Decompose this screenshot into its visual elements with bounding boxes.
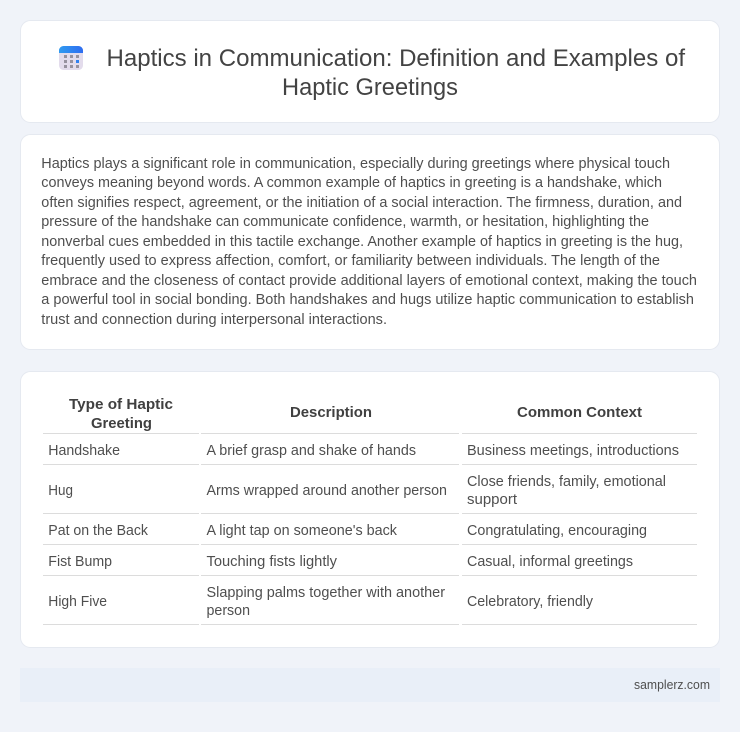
text block: introduction paragraph: Haptics plays a significant role in communication, especially during greetings where physical touch bbox=[41, 156, 670, 172]
table row: fist bump: Fist Bump bbox=[48, 554, 112, 570]
table row: high five: Celebratory, friendly bbox=[467, 594, 594, 610]
text block: introduction paragraph: a powerful tool in social bonding. Both handshakes and hugs utilize haptic communication to establish bbox=[41, 292, 694, 308]
table row: pat on the back bbox=[43, 523, 697, 545]
table row: high five: person bbox=[206, 603, 250, 619]
heading: Haptics in Communication: Definition and Examples of bbox=[106, 45, 685, 72]
footer bar bbox=[20, 668, 720, 702]
table row: hug: Close friends, family, emotional bbox=[467, 474, 666, 490]
text block: introduction paragraph: nonverbal cues embedded in this tactile exchange. Another example of haptics in greeting is the hug, bbox=[41, 234, 683, 250]
table row: pat on the back: Congratulating, encouraging bbox=[467, 523, 647, 539]
text block: introduction paragraph bbox=[41, 156, 697, 328]
table header row bbox=[43, 396, 697, 434]
panel: introduction bbox=[20, 134, 720, 350]
table row: handshake bbox=[43, 443, 697, 465]
text block: introduction paragraph: conveys meaning beyond words. A common example of haptics in greeting is a handshake, which bbox=[41, 175, 662, 191]
text block: introduction paragraph: embrace and the closeness of contact provide additional layers of emotional context, making the touch bbox=[41, 273, 697, 289]
table header row: Greeting bbox=[91, 415, 152, 432]
text block: introduction paragraph: often signifies respect, agreement, or the initiation of a social interaction. The firmness, duration, and bbox=[41, 195, 682, 211]
text block: introduction paragraph: trust and connection during interpersonal interactions. bbox=[41, 312, 387, 328]
table row: handshake: Handshake bbox=[48, 443, 120, 459]
table row: handshake: A brief grasp and shake of hands bbox=[206, 443, 416, 459]
table row: high five: High Five bbox=[48, 594, 107, 610]
table header row: Description bbox=[290, 404, 372, 421]
footer source text: samplerz.com bbox=[634, 677, 710, 692]
table row: fist bump: Casual, informal greetings bbox=[467, 554, 633, 570]
heading: Haptic Greetings bbox=[282, 74, 458, 101]
panel: title card bbox=[20, 20, 720, 122]
table row: high five: Slapping palms together with another bbox=[206, 585, 445, 601]
table row: fist bump: Touching fists lightly bbox=[206, 554, 338, 570]
table row: hug: support bbox=[467, 492, 517, 508]
panel: table card bbox=[20, 372, 720, 648]
text block: introduction paragraph: pressure of the handshake can communicate confidence, warmth, or hesitation, highlighting the bbox=[41, 214, 649, 230]
icon: calendar bbox=[59, 46, 83, 70]
table row: pat on the back: Pat on the Back bbox=[48, 523, 149, 539]
table header row: Common Context bbox=[517, 404, 642, 421]
table row: high five bbox=[43, 585, 697, 625]
text block: introduction paragraph: frequently used to express affection, comfort, or familiarity between individuals. The length of the bbox=[41, 253, 660, 269]
table row: fist bump bbox=[43, 554, 697, 576]
heading bbox=[106, 45, 685, 101]
table header row: Type of Haptic bbox=[69, 396, 173, 413]
table row: hug bbox=[43, 474, 697, 514]
table row: handshake: Business meetings, introductions bbox=[467, 443, 679, 459]
table row: hug: Arms wrapped around another person bbox=[206, 483, 447, 499]
table row: hug: Hug bbox=[48, 483, 73, 499]
table row: pat on the back: A light tap on someone's back bbox=[206, 523, 398, 539]
